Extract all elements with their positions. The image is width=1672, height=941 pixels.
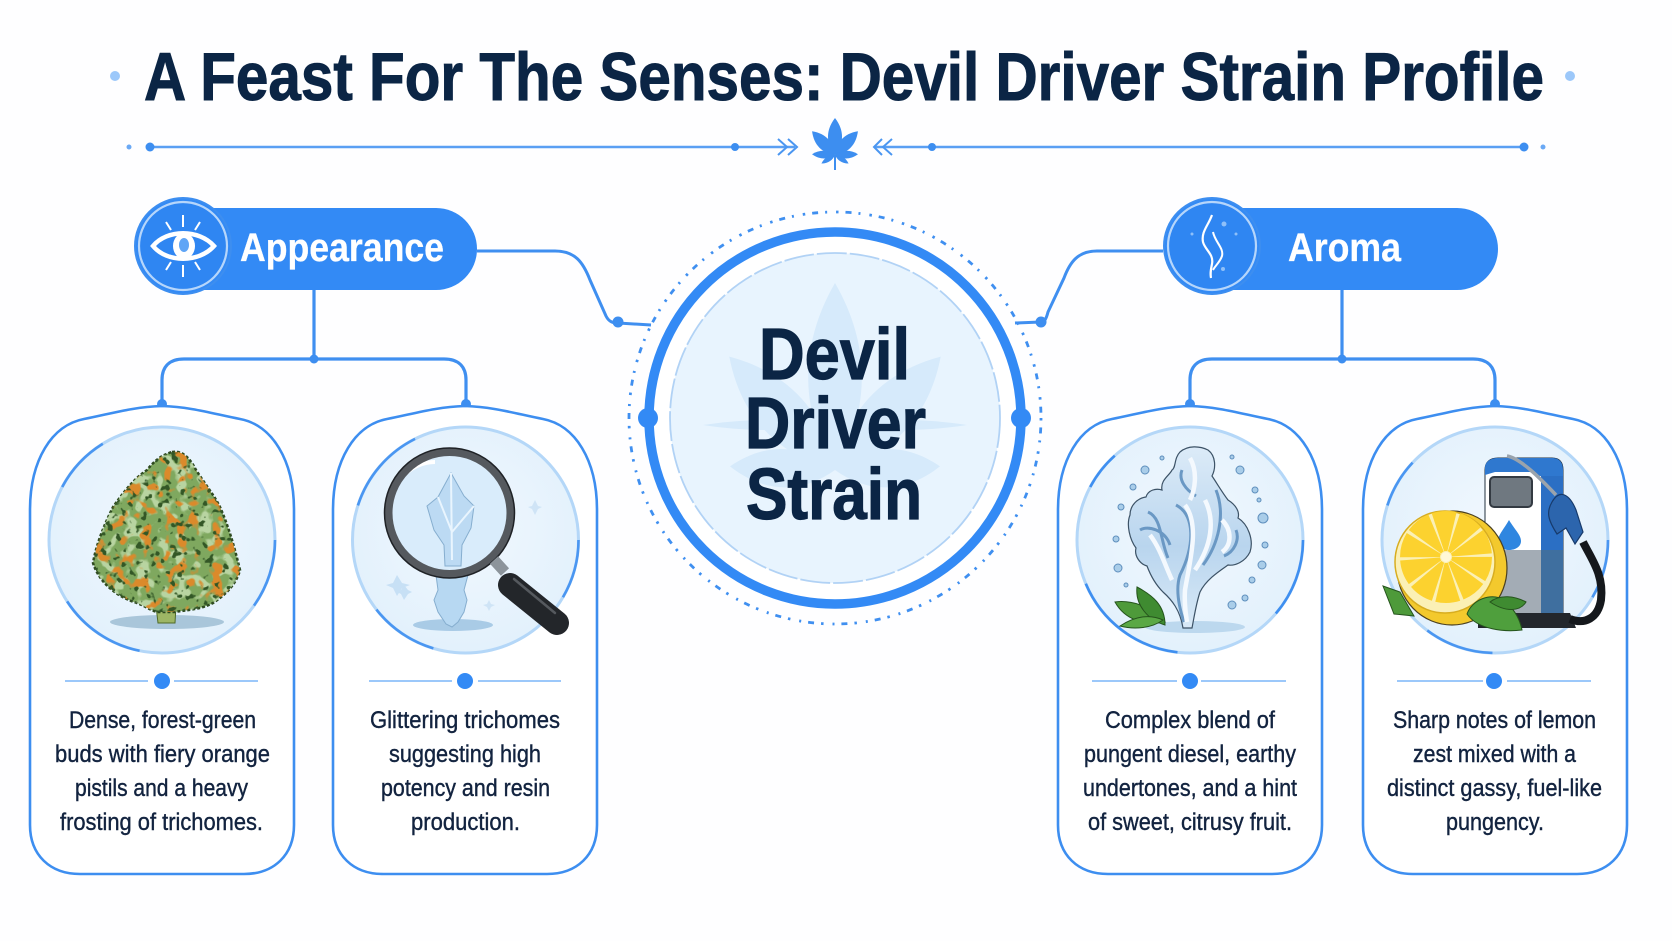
heading pill: Appearance bbox=[135, 198, 477, 294]
icon: cannabis leaf bbox=[808, 118, 862, 170]
description: distinct gassy, fuel-like bbox=[1387, 775, 1602, 802]
description: Dense, forest-green bbox=[69, 707, 256, 734]
description bbox=[370, 707, 560, 836]
icon: fuel pump bbox=[1478, 456, 1601, 628]
icon: magnifier over crystal bbox=[384, 448, 557, 631]
description: zest mixed with a bbox=[1413, 741, 1576, 768]
description: potency and resin bbox=[381, 775, 550, 802]
description: of sweet, citrusy fruit. bbox=[1088, 809, 1292, 836]
description: pungency. bbox=[1446, 809, 1544, 836]
icon: aroma swirl with leaves bbox=[1113, 447, 1268, 633]
divider bbox=[369, 673, 561, 689]
description: undertones, and a hint bbox=[1083, 775, 1297, 802]
center hub bbox=[629, 212, 1041, 624]
description: Sharp notes of lemon bbox=[1393, 707, 1596, 734]
hub title: Strain bbox=[746, 455, 922, 535]
hub title: Driver bbox=[745, 384, 926, 464]
panel: lemon and fuel card bbox=[1363, 406, 1627, 874]
heading pill: Aroma bbox=[1164, 198, 1498, 294]
description: pistils and a heavy bbox=[75, 775, 249, 802]
label: Aroma: Aroma bbox=[1288, 226, 1402, 270]
icon: eye bbox=[135, 198, 231, 294]
label: Appearance: Appearance bbox=[240, 226, 444, 270]
icon: illustration disc bbox=[49, 427, 275, 653]
icon: cannabis bud bbox=[88, 445, 246, 629]
description: suggesting high bbox=[389, 741, 541, 768]
hub title bbox=[745, 315, 926, 535]
description bbox=[55, 707, 270, 836]
divider bbox=[65, 673, 258, 689]
description: Complex blend of bbox=[1105, 707, 1275, 734]
description: frosting of trichomes. bbox=[60, 809, 263, 836]
icon: illustration disc bbox=[1382, 427, 1608, 653]
hub title: Devil bbox=[759, 315, 910, 395]
description: Glittering trichomes bbox=[370, 707, 560, 734]
icon: watermark leaf bbox=[703, 283, 967, 489]
panel: dense buds card bbox=[30, 406, 294, 874]
connector: Appearance branch bbox=[157, 288, 471, 409]
panel: trichomes card bbox=[333, 406, 597, 874]
connector: Aroma branch bbox=[1185, 288, 1500, 409]
description bbox=[1083, 707, 1297, 836]
divider bbox=[1092, 673, 1286, 689]
panel: complex blend card bbox=[1058, 406, 1322, 874]
icon: lemon half bbox=[1383, 511, 1526, 631]
hose and nozzle bbox=[1507, 456, 1556, 495]
title divider with leaf and arrows bbox=[126, 118, 1546, 170]
connector: Aroma to center bbox=[1015, 251, 1163, 328]
description: buds with fiery orange bbox=[55, 741, 270, 768]
description: pungent diesel, earthy bbox=[1084, 741, 1297, 768]
description bbox=[1387, 707, 1602, 836]
icon: illustration disc bbox=[352, 427, 578, 653]
icon: illustration disc bbox=[1077, 427, 1303, 653]
icon: aroma wisp bbox=[1164, 198, 1260, 294]
connector: Appearance to center bbox=[477, 251, 651, 328]
description: production. bbox=[411, 809, 520, 836]
divider bbox=[1397, 673, 1591, 689]
